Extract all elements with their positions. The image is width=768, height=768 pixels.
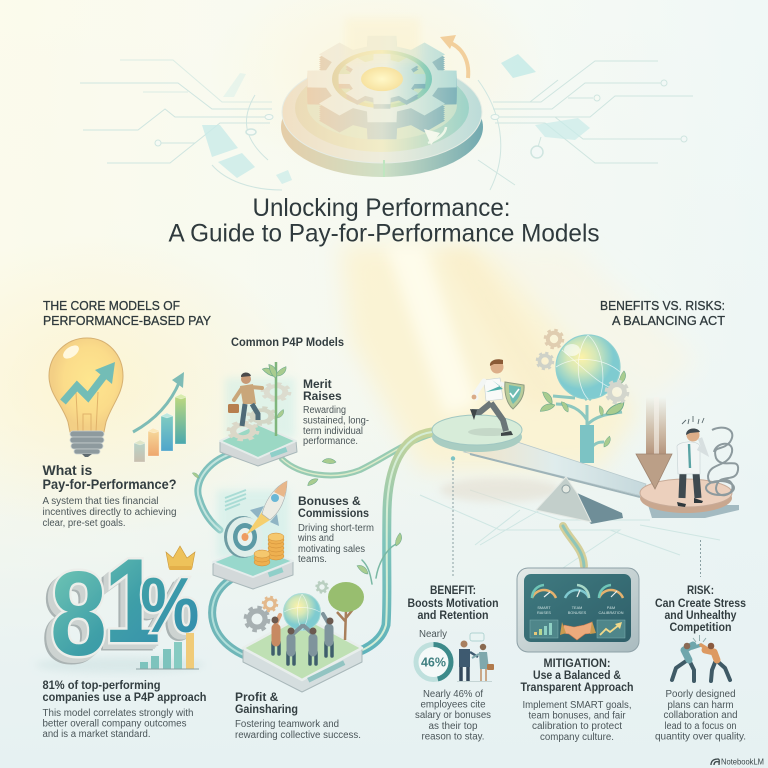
icon: light bulb with rising arrow xyxy=(49,338,123,457)
section heading: benefits vs risks xyxy=(600,298,725,328)
footer: NotebookLM logo: NotebookLM xyxy=(721,756,764,766)
text: benefit heading: and Retention xyxy=(418,608,488,622)
text: profit and gainsharing: rewarding collective success. xyxy=(235,730,361,741)
seesaw shadow xyxy=(440,478,560,502)
text: 81 percent description: companies use a P4P approach xyxy=(42,690,206,704)
icon: person climbing gears with plant xyxy=(220,362,297,466)
icon: rocket, target and coins xyxy=(213,481,293,589)
panel: bonuses and commissions xyxy=(213,481,374,589)
text: what is pay-for-performance: What is xyxy=(42,462,92,478)
section heading: core models: THE CORE MODELS OF xyxy=(43,298,180,313)
gauge labels: BONUSES xyxy=(568,611,587,615)
text: benefit description: reason to stay. xyxy=(422,732,484,742)
text: benefit description xyxy=(415,689,491,742)
panel: benefit xyxy=(408,583,498,742)
text: merit raises: performance. xyxy=(303,436,358,447)
text: mitigation: MITIGATION: xyxy=(544,656,610,670)
text: risk description: Poorly designed xyxy=(666,689,736,700)
text: merit raises: term individual xyxy=(303,426,363,437)
text: merit raises: Rewarding xyxy=(303,405,346,416)
trend tile xyxy=(597,620,625,638)
panel: risk xyxy=(655,583,746,742)
gauge labels: TEAM xyxy=(572,606,582,610)
icon: two people pushing xyxy=(672,635,730,681)
icon: handshake xyxy=(560,621,596,640)
icon: dashboard xyxy=(517,568,639,652)
text: merit raises xyxy=(303,377,369,447)
icon: curved orange arrow xyxy=(440,35,468,78)
panel: profit and gainsharing xyxy=(235,581,364,741)
text: risk description: lead to a focus on xyxy=(664,721,736,732)
text: mitigation: Use a Balanced & xyxy=(533,668,621,682)
gauges xyxy=(532,585,623,598)
text: profit and gainsharing: Profit & xyxy=(235,690,279,704)
text: benefit heading xyxy=(408,583,498,622)
gauge labels xyxy=(537,606,624,615)
big number 81%: 8 xyxy=(50,546,107,681)
panel: 81 percent statistic xyxy=(35,533,206,740)
text: mitigation: company culture. xyxy=(540,732,614,743)
section heading: core models xyxy=(43,298,211,328)
vines connecting the model platforms xyxy=(192,432,432,656)
teal circuit blocks xyxy=(202,54,590,184)
icon: two colleagues talking xyxy=(457,633,494,682)
text: merit raises: Raises xyxy=(303,389,342,403)
text: what is pay-for-performance: clear, pre-set goals. xyxy=(42,518,126,529)
text: risk description: collaboration and xyxy=(664,710,738,721)
chart: seesaw xyxy=(432,415,739,524)
text: what is pay-for-performance: A system that ties financial xyxy=(42,496,158,507)
panel: merit raises xyxy=(220,362,369,466)
text: bonuses and commissions: wins and xyxy=(297,533,334,544)
text: risk heading: and Unhealthy xyxy=(664,608,737,622)
text: mitigation: team bonuses, and fair xyxy=(528,710,626,722)
text: profit and gainsharing xyxy=(235,690,361,741)
text: bonuses and commissions: Commissions xyxy=(298,506,369,520)
text: benefit description: as their top xyxy=(428,721,478,732)
text: 81 percent description: This model correlates strongly with xyxy=(42,708,194,719)
text: mitigation: Implement SMART goals, xyxy=(522,700,632,711)
text: 81 percent description xyxy=(42,678,206,740)
circuit lines under seesaw xyxy=(420,490,720,570)
mini chart tile xyxy=(530,620,558,638)
title xyxy=(168,194,600,248)
text: benefit heading: Boosts Motivation xyxy=(408,596,498,610)
icon: tree with globe xyxy=(537,330,629,463)
icon: main gear on circular base xyxy=(281,18,483,177)
text: 81 percent description: 81% of top-performing xyxy=(42,678,160,692)
section heading: benefits vs risks: A BALANCING ACT xyxy=(612,313,725,328)
connector: vine into dashboard xyxy=(563,526,584,566)
dashed pointers xyxy=(453,462,700,578)
text: profit and gainsharing: Gainsharing xyxy=(235,702,298,716)
gauge labels: P&M xyxy=(607,606,615,610)
gauge labels: SMART xyxy=(537,606,551,610)
gauge labels: RAISES xyxy=(537,611,551,615)
text: mitigation: Transparent Approach xyxy=(520,680,634,694)
mini bar chart xyxy=(136,633,199,669)
icon: running person with shield xyxy=(468,359,524,436)
text: merit raises: Merit xyxy=(303,377,332,391)
text: bonuses and commissions: Driving short-term xyxy=(298,523,374,534)
chart: 46 percent donut xyxy=(416,644,451,680)
text: bonuses and commissions: teams. xyxy=(298,554,327,565)
text: what is pay-for-performance xyxy=(42,462,176,529)
icon: crown xyxy=(166,546,195,570)
icon: team holding a globe on a platform xyxy=(243,581,364,692)
text: 81 percent description: better overall company outcomes xyxy=(42,718,187,730)
bar chart with curved arrow xyxy=(133,372,187,462)
big number 81%: 1 xyxy=(104,533,160,668)
text: risk heading: Can Create Stress xyxy=(655,596,746,610)
right platform xyxy=(640,479,739,518)
text: what is pay-for-performance: incentives directly to achieving xyxy=(42,507,176,518)
text: nearly: Nearly xyxy=(419,629,447,640)
text: risk heading: Competition xyxy=(670,620,732,634)
icon: stressed person with coil xyxy=(677,416,738,507)
text: risk description: plans can harm xyxy=(668,700,734,711)
heading: common p4p models: Common P4P Models xyxy=(231,335,344,349)
text: bonuses and commissions xyxy=(297,494,374,565)
text: bonuses and commissions: Bonuses & xyxy=(298,494,361,508)
text: merit raises: sustained, long- xyxy=(303,416,369,426)
chart: 46 percent donut: 46% xyxy=(421,656,446,670)
arrow: downward pressure xyxy=(636,397,672,489)
text: risk heading: RISK: xyxy=(687,583,714,597)
title: A Guide to Pay-for-Performance Models xyxy=(168,220,600,248)
section heading: benefits vs risks: BENEFITS VS. RISKS: xyxy=(600,298,725,313)
left platform xyxy=(432,415,522,452)
text: risk heading xyxy=(655,583,746,634)
text: mitigation: calibration to protect xyxy=(532,721,622,732)
section heading: core models: PERFORMANCE-BASED PAY xyxy=(43,313,211,328)
text: benefit heading: BENEFIT: xyxy=(430,583,476,597)
text: 81 percent description: and is a market standard. xyxy=(42,729,150,740)
text: mitigation xyxy=(520,656,634,743)
big number 81%: % xyxy=(140,562,199,649)
text: risk description xyxy=(655,689,746,742)
text: profit and gainsharing: Fostering teamwork and xyxy=(235,719,339,730)
text: bonuses and commissions: motivating sales xyxy=(298,544,365,555)
text: benefit description: salary or bonuses xyxy=(415,710,491,721)
text: risk description: quantity over quality. xyxy=(655,732,746,742)
text: benefit description: employees cite xyxy=(420,700,486,710)
text: what is pay-for-performance: Pay-for-Performance? xyxy=(42,476,176,492)
circuit lines background xyxy=(80,60,693,190)
gauge labels: CALIBRATION xyxy=(598,611,624,615)
title: Unlocking Performance: xyxy=(252,194,510,222)
text: benefit description: Nearly 46% of xyxy=(423,689,483,700)
panel: mitigation xyxy=(517,568,639,743)
